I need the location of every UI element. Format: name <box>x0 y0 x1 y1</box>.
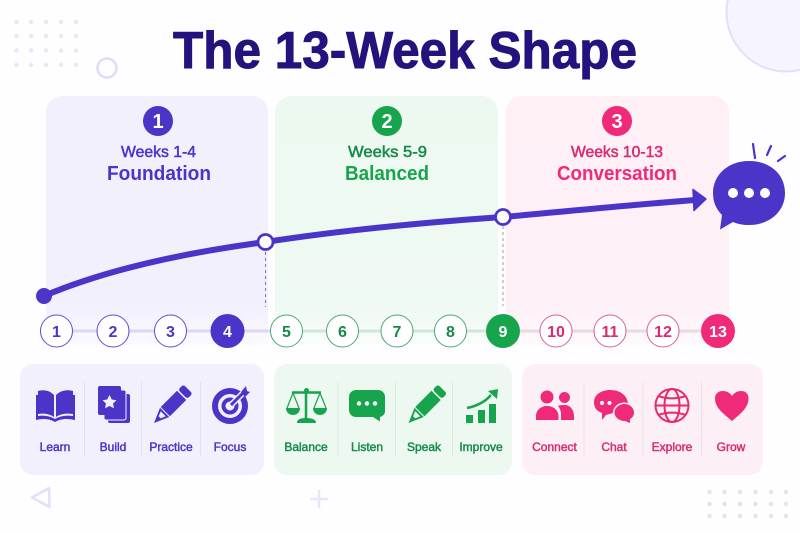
decorative dots: bottom right <box>707 490 788 518</box>
week timeline: 2 <box>109 324 118 341</box>
week timeline: 6 <box>338 324 347 341</box>
icon: target <box>215 386 250 421</box>
label: Speak: Speak <box>407 440 442 454</box>
badge: phase 2 <box>372 106 402 136</box>
decorative dots: top left <box>14 20 78 67</box>
label: Focus: Focus <box>214 440 246 454</box>
panel: phase 3 conversation <box>506 96 729 345</box>
milestone week 9 <box>496 210 510 224</box>
label: Practice: Practice <box>149 440 193 454</box>
week timeline: 3 <box>166 324 175 341</box>
decorative triangle <box>32 488 50 507</box>
icon: cards <box>98 386 130 423</box>
badge: phase 3: 3 <box>611 111 623 133</box>
week timeline: 1 <box>52 324 61 341</box>
decorative plus <box>311 491 327 507</box>
icon: listen bubble <box>349 390 385 422</box>
icon: scales <box>286 388 327 423</box>
phase 1 name: Foundation <box>107 163 211 185</box>
label: Explore: Explore <box>652 440 693 454</box>
week timeline: 13 <box>709 324 727 341</box>
label: Build: Build <box>100 440 126 454</box>
week timeline: 4 <box>223 324 232 341</box>
label: Improve: Improve <box>459 440 503 454</box>
week connector lines <box>56 330 286 332</box>
decorative large circle: top right <box>726 0 800 72</box>
week timeline: 11 <box>602 324 619 341</box>
panel: phase 1 foundation <box>46 96 268 345</box>
week timeline <box>40 314 735 348</box>
phase 3 name: Conversation <box>557 163 677 185</box>
week timeline: 5 <box>282 324 291 341</box>
badge: phase 1: 1 <box>152 111 164 133</box>
icon: heart <box>715 391 748 421</box>
icon: growth bars <box>466 389 498 423</box>
week timeline: 10 <box>547 324 565 341</box>
dashed guides <box>264 252 266 307</box>
title: The 13-Week Shape <box>173 22 637 80</box>
panel: conversation skills <box>522 364 763 475</box>
phase 3 weeks: Weeks 10-13 <box>571 144 663 161</box>
panel: balanced skills <box>274 364 512 475</box>
milestone week 4 <box>258 234 273 250</box>
icon: chat bubbles <box>594 390 634 423</box>
icon: people <box>536 390 574 420</box>
label: Chat: Chat <box>601 440 627 454</box>
label: Grow: Grow <box>717 440 746 454</box>
phase 2 name: Balanced <box>345 163 429 185</box>
badge: phase 2: 2 <box>381 111 393 133</box>
decorative ring <box>98 58 116 78</box>
week timeline: 9 <box>499 324 508 341</box>
curve start point <box>36 288 52 304</box>
icon: globe <box>656 389 688 422</box>
panel: phase 2 balanced <box>275 96 498 345</box>
icon: green pencil <box>404 384 447 428</box>
arrow head <box>693 190 706 210</box>
icon: pencil <box>149 384 193 428</box>
week timeline: 8 <box>446 324 455 341</box>
phase 1 weeks: Weeks 1-4 <box>121 144 196 161</box>
label: Learn: Learn <box>40 440 70 454</box>
icon: conversation bubble <box>713 144 785 230</box>
icon: book <box>36 390 75 422</box>
label: Balance: Balance <box>284 440 328 454</box>
badge: phase 1 <box>143 106 173 136</box>
week timeline: 7 <box>393 324 402 341</box>
growth curve with arrow <box>36 190 706 304</box>
badge: phase 3 <box>602 106 632 136</box>
phase 2 weeks: Weeks 5-9 <box>348 144 427 161</box>
label: Listen: Listen <box>351 440 383 454</box>
week timeline: 12 <box>654 324 672 341</box>
panel: foundation skills <box>20 364 264 475</box>
label: Connect: Connect <box>532 440 578 454</box>
